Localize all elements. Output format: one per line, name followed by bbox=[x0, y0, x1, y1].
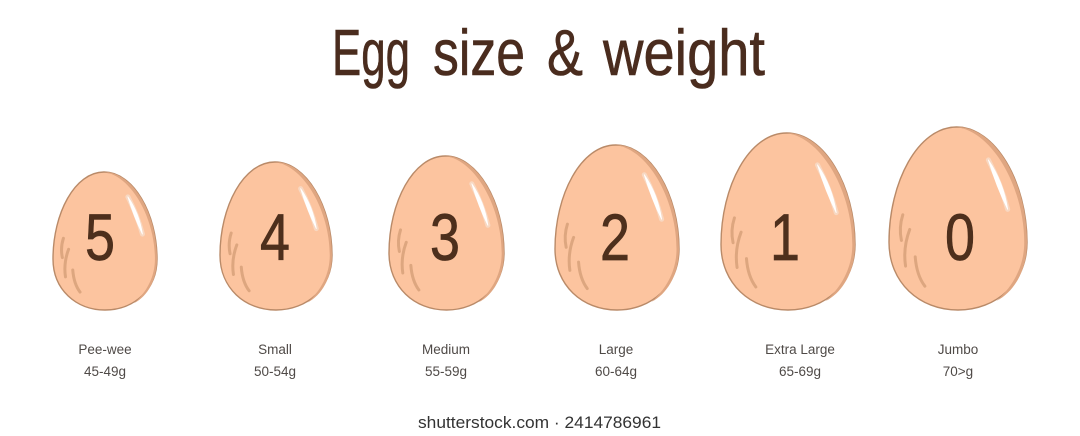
egg 1: extra large bbox=[721, 133, 855, 310]
label: pee-wee: Pee-wee bbox=[78, 342, 132, 357]
label: medium: 55-59g bbox=[425, 364, 467, 379]
label: jumbo: Jumbo bbox=[938, 342, 978, 357]
title bbox=[332, 16, 765, 89]
egg 3: medium bbox=[389, 156, 504, 310]
label: extra large bbox=[765, 342, 835, 379]
label: small: 50-54g bbox=[254, 364, 296, 379]
label: small bbox=[254, 342, 296, 379]
label: large: Large bbox=[599, 342, 633, 357]
number 4: 4 bbox=[260, 200, 290, 274]
label: large bbox=[595, 342, 637, 379]
label: jumbo: 70>g bbox=[943, 364, 973, 379]
title: size bbox=[433, 16, 525, 89]
label: extra large: 65-69g bbox=[779, 364, 821, 379]
egg shell 4 bbox=[220, 162, 332, 310]
label: extra large: Extra Large bbox=[765, 342, 835, 357]
egg shell 3 bbox=[389, 156, 504, 310]
label: jumbo bbox=[938, 342, 978, 379]
egg 4: small bbox=[220, 162, 332, 310]
number 2: 2 bbox=[600, 200, 630, 274]
label: small: Small bbox=[258, 342, 292, 357]
title: weight bbox=[602, 16, 765, 89]
number 3: 3 bbox=[430, 200, 460, 274]
title: Egg bbox=[332, 16, 410, 89]
title: & bbox=[547, 16, 583, 89]
label: pee-wee: 45-49g bbox=[84, 364, 126, 379]
number 5: 5 bbox=[85, 200, 115, 274]
egg shell 2 bbox=[555, 145, 679, 310]
egg 0: jumbo bbox=[889, 127, 1027, 310]
label: medium bbox=[422, 342, 470, 379]
stock image credit: shutterstock.com · 2414786961 bbox=[418, 414, 661, 432]
egg shell 1 bbox=[721, 133, 855, 310]
egg 2: large bbox=[555, 145, 679, 310]
number 1: 1 bbox=[770, 200, 800, 274]
egg shell 5 bbox=[53, 172, 157, 310]
label: medium: Medium bbox=[422, 342, 470, 357]
label: pee-wee bbox=[78, 342, 132, 379]
egg shell 0 bbox=[889, 127, 1027, 310]
label: large: 60-64g bbox=[595, 364, 637, 379]
egg 5: pee-wee bbox=[53, 172, 157, 310]
number 0: 0 bbox=[945, 200, 975, 274]
